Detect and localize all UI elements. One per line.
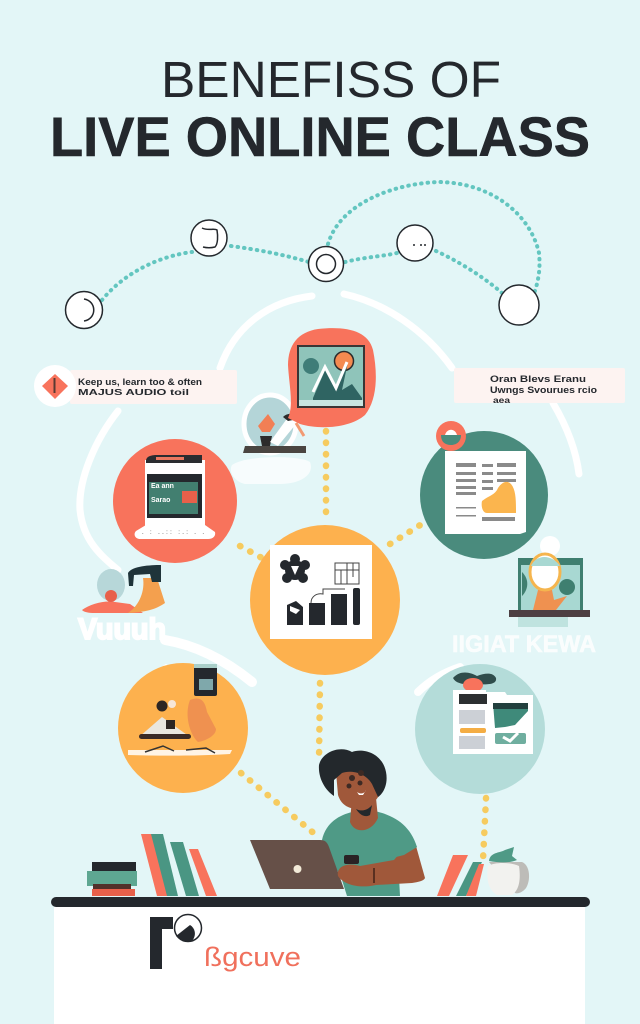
illustration: video call laptop [509, 536, 590, 627]
node 1 [66, 292, 102, 328]
illustration: mug [487, 847, 529, 895]
desk top [51, 897, 590, 907]
faded white lettering: Vuuuh [78, 613, 166, 646]
node 4 [397, 225, 433, 261]
illustration: student at laptop [250, 749, 425, 896]
node 2 [191, 220, 227, 256]
faded white lettering: IIGIAT KEWA [452, 631, 596, 658]
logo [150, 914, 301, 972]
callout: left: Keep us, learn too & often [78, 377, 202, 387]
panel: coral laptop circle: . : ..:: :.: . . [142, 530, 204, 536]
illustration: reclining learner [82, 565, 165, 613]
callout: right: aea [493, 396, 511, 405]
panel: pale teal profile circle [415, 664, 545, 794]
callout: right: Uwngs Svourues rcio [490, 385, 598, 395]
faded white lettering [78, 613, 596, 658]
panel: white desk front [54, 907, 585, 1024]
logo: ßgcuve [204, 942, 301, 972]
white ribbon arcs [80, 294, 579, 695]
sleeve [392, 828, 417, 858]
panel: top picture blob [288, 328, 376, 427]
callout: right: Oran Blevs Eranu [490, 374, 586, 384]
illustration: right books [437, 855, 484, 896]
title: LIVE ONLINE CLASS [50, 105, 590, 168]
panel: orange desk circle [118, 663, 248, 793]
illustration: left books [141, 834, 217, 896]
face markings [346, 770, 364, 788]
callout: left: MAJUS AUDIO toil [78, 388, 189, 397]
title [50, 51, 590, 168]
panel: coral laptop circle: Sarao [151, 497, 170, 504]
hair [319, 749, 387, 797]
laptop [250, 840, 344, 889]
panel: green document circle [420, 421, 548, 559]
node 3 [308, 246, 344, 282]
panel: coral laptop circle: Ea ann [151, 483, 174, 490]
callout: right [454, 368, 625, 405]
yellow dotted connectors [240, 431, 486, 860]
illustration: stack of books [87, 862, 137, 896]
chart lines [456, 463, 516, 521]
head [336, 766, 383, 809]
icon: gear flower [280, 554, 310, 583]
title: BENEFISS OF [161, 51, 501, 108]
neck [350, 798, 378, 830]
bar chart [287, 588, 360, 625]
shirt [322, 811, 417, 896]
panel: coral laptop circle [113, 439, 237, 563]
illustration: small figure at desk [231, 395, 311, 484]
icon: diamond [42, 374, 68, 399]
panel: central chart circle [250, 525, 400, 675]
callout: left [34, 365, 237, 407]
dotted network of nodes [66, 182, 540, 328]
node 5 [499, 285, 539, 325]
arm and hand [338, 846, 425, 886]
